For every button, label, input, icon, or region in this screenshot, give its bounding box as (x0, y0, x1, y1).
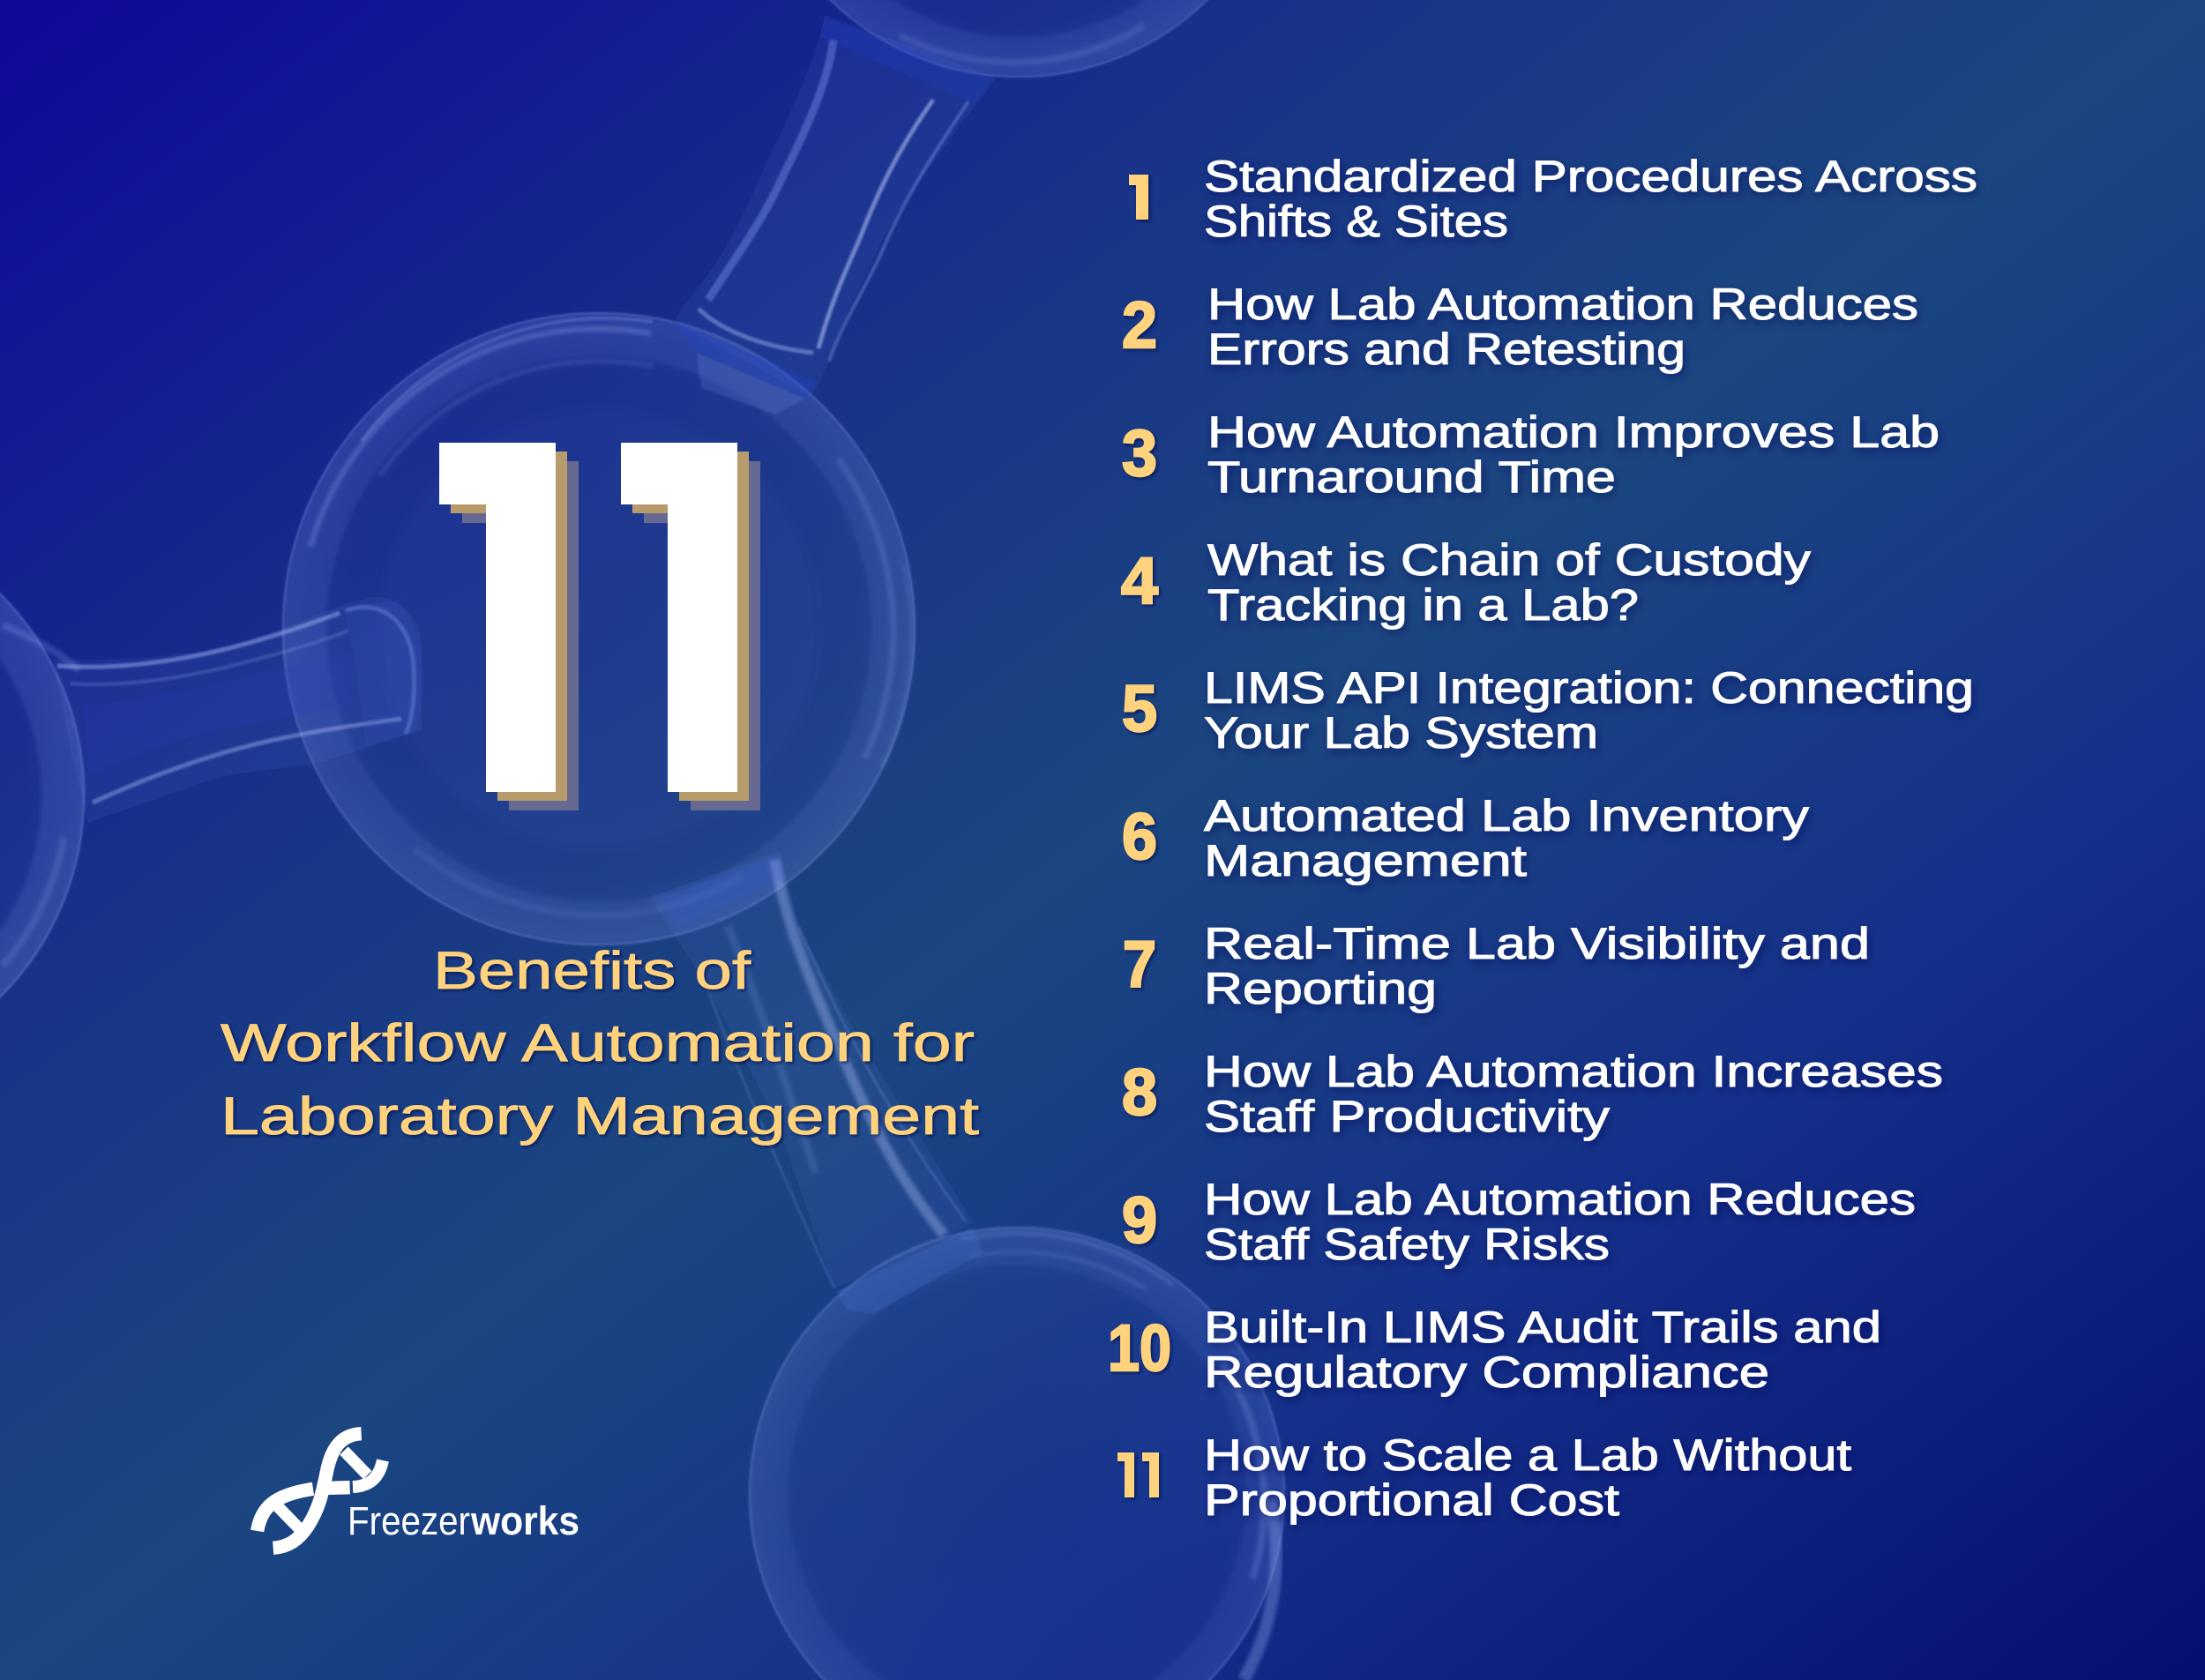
list item 10: Built-In LIMS Audit Trails and (1204, 1303, 1881, 1352)
numeral face: white (439, 443, 737, 792)
list item 8: How Lab Automation Increases (1204, 1047, 1943, 1096)
list item 5: Your Lab System (1204, 708, 1598, 758)
list item 2: How Lab Automation Reduces (1207, 280, 1918, 329)
list item 6: Management (1204, 836, 1527, 885)
numeral shadow: tan layer: 1 (377, 342, 652, 894)
numbered list of benefits (1108, 152, 1977, 1525)
list item 2 (1122, 280, 1918, 374)
list item 7: Real-Time Lab Visibility and (1204, 919, 1870, 968)
list item 8: 8 (1122, 1056, 1157, 1129)
list item 5: 5 (1122, 672, 1157, 745)
list item 10: 10 (1108, 1311, 1171, 1385)
list item 1 (1129, 159, 1979, 243)
list item 6: Automated Lab Inventory (1204, 791, 1809, 840)
logo wordmark: Freezer (348, 1498, 470, 1543)
list item 7 (1123, 919, 1870, 1013)
list item 11: How to Scale a Lab Without (1204, 1430, 1851, 1480)
list item 10: Regulatory Compliance (1204, 1348, 1769, 1397)
list item 3: How Automation Improves Lab (1207, 407, 1940, 457)
glass sphere: bottom (749, 1227, 1285, 1680)
heading: benefits of workflow automation for laboratory management: Laboratory Management (220, 1086, 979, 1146)
logo wordmark: works (470, 1498, 579, 1543)
list item 10 (1108, 1303, 1881, 1397)
list item 2: Errors and Retesting (1207, 325, 1686, 374)
numeral face: white: 1 (547, 333, 822, 885)
glass sphere: top (749, 0, 1289, 78)
list item 4: 4 (1121, 544, 1158, 617)
list item 7: 7 (1123, 928, 1156, 1001)
list item 3 (1122, 407, 1940, 502)
list item 9: Staff Safety Risks (1204, 1220, 1610, 1269)
list item 1: Shifts & Sites (1204, 197, 1508, 246)
logo: Freezerworks (258, 1434, 579, 1548)
numeral shadow: grey layer: 1 (570, 352, 845, 904)
glass molecule illustration (0, 0, 1289, 1680)
list item 11: 11 (1116, 1438, 1162, 1512)
numeral shadow: tan layer: 1 (558, 342, 833, 894)
numeral shadow: grey layer (462, 461, 760, 810)
list item 11: Proportional Cost (1204, 1475, 1619, 1525)
list item 4: What is Chain of Custody (1207, 535, 1811, 585)
big numeral 11 (439, 443, 760, 810)
list item 9: How Lab Automation Reduces (1204, 1175, 1916, 1224)
list item 3: Turnaround Time (1207, 452, 1616, 502)
list item 1: Standardized Procedures Across (1204, 152, 1977, 201)
logo icon: DNA helix (258, 1434, 383, 1548)
list item 9 (1122, 1175, 1916, 1269)
list item 8 (1122, 1047, 1943, 1141)
list item 4 (1121, 535, 1811, 630)
heading: benefits of workflow automation for laboratory management (220, 941, 979, 1146)
list item 4: Tracking in a Lab? (1207, 580, 1639, 630)
list item 8: Staff Productivity (1204, 1092, 1610, 1141)
list item 9: 9 (1122, 1183, 1157, 1257)
glass tube: top (675, 15, 996, 414)
numeral face: white: 1 (365, 333, 640, 885)
numeral shadow: tan layer (451, 452, 749, 801)
glass sphere: left (0, 511, 85, 1080)
list item 11 (1116, 1430, 1851, 1525)
heading: benefits of workflow automation for laboratory management: Workflow Automation for (220, 1013, 975, 1072)
glass sphere: centre (282, 312, 916, 945)
glass tube: bottom (650, 851, 983, 1314)
list item 5: LIMS API Integration: Connecting (1204, 663, 1974, 713)
list item 6 (1122, 791, 1809, 885)
list item 3: 3 (1122, 416, 1157, 489)
numeral shadow: grey layer: 1 (388, 352, 663, 904)
list item 2: 2 (1122, 288, 1157, 362)
list item 6: 6 (1122, 800, 1157, 873)
heading: benefits of workflow automation for laboratory management: Benefits of (433, 941, 751, 1000)
list item 5 (1122, 663, 1974, 758)
list item 1: 1 (1126, 161, 1153, 234)
glass tube: left (53, 597, 423, 823)
list item 7: Reporting (1204, 964, 1437, 1013)
